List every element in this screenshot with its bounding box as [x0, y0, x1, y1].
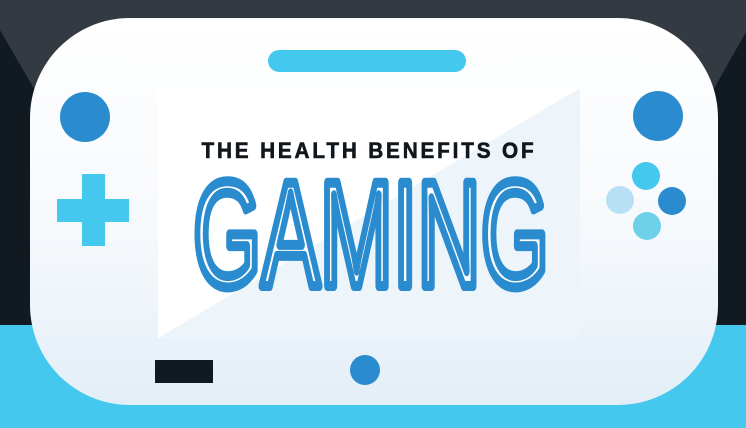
bottom black button: [155, 360, 213, 383]
speaker pill: [268, 50, 466, 72]
bottom home circle: [350, 355, 380, 385]
button: left top circle: [60, 92, 110, 142]
title: THE HEALTH BENEFITS OF: [202, 138, 536, 163]
background top band: [0, 0, 746, 92]
screen panel: [158, 88, 580, 338]
icon: d-pad plus: [57, 174, 129, 246]
bottom blue band: [0, 325, 746, 428]
action buttons: [606, 162, 686, 240]
button: right top circle: [633, 91, 683, 141]
